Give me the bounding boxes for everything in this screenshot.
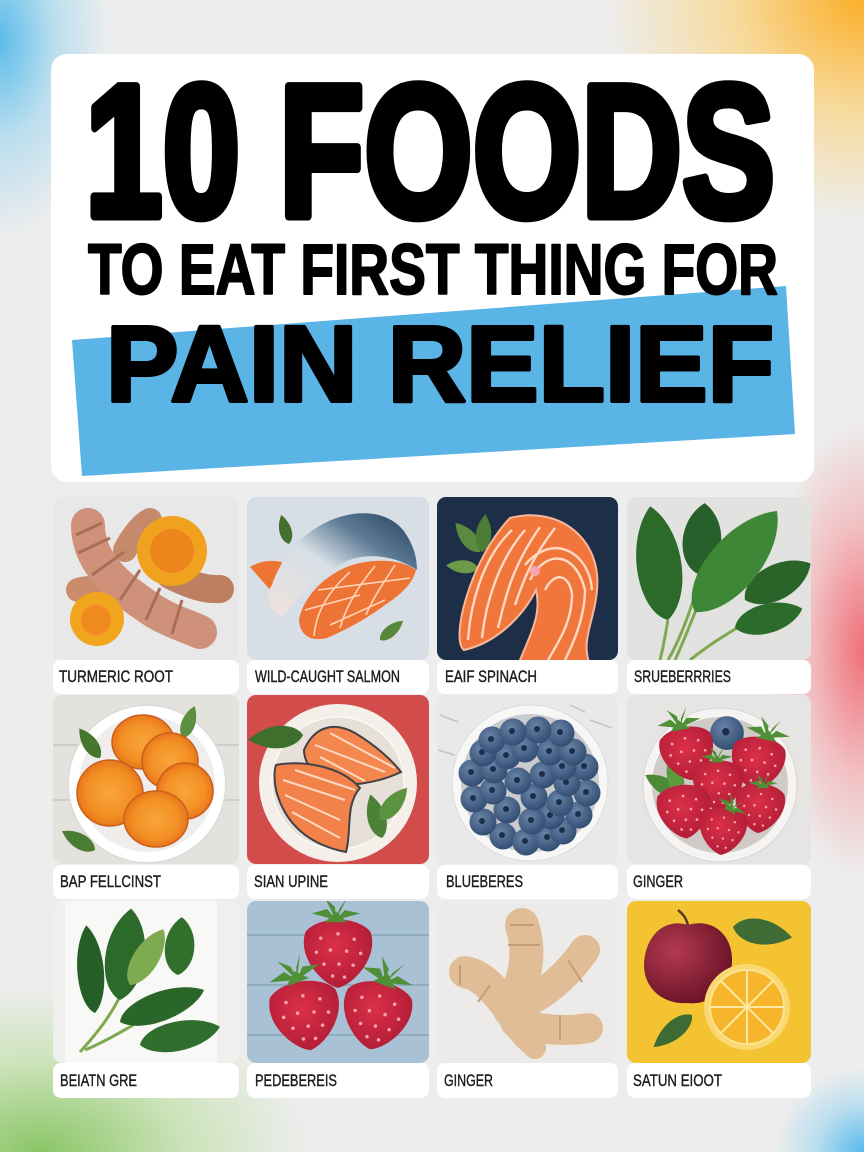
card: strawberries on wood: PEDEBEREIS <box>255 1072 337 1090</box>
card: salmon plate <box>247 695 429 899</box>
label <box>247 660 429 694</box>
label <box>437 1063 618 1098</box>
card: ginger: GINGER <box>444 1072 493 1090</box>
label <box>627 865 811 899</box>
card: wild-caught salmon: WILD-CAUGHT SALMON <box>255 668 400 686</box>
card: strawberries bowl: GINGER <box>633 873 683 891</box>
card: salmon plate: SIAN UPINE <box>254 873 328 891</box>
card: spinach leaves <box>627 495 819 694</box>
label <box>437 865 618 899</box>
card: apple and lemon <box>627 901 811 1098</box>
card: leaf spinach (salmon steak): EAIF SPINACH <box>445 668 537 686</box>
card: orange slices plate <box>53 695 239 899</box>
card: turmeric root: TURMERIC ROOT <box>59 668 173 686</box>
title: PAIN RELIEF: PAIN RELIEF <box>106 303 774 424</box>
card: leaf spinach (salmon steak) <box>437 497 618 694</box>
card: strawberries bowl <box>627 695 811 899</box>
label <box>437 660 618 694</box>
card: orange slices plate: BAP FELLCINST <box>60 873 161 891</box>
label <box>53 1063 239 1098</box>
card: spinach on white board: BEIATN GRE <box>60 1072 137 1090</box>
card: wild-caught salmon <box>247 497 429 694</box>
title panel <box>51 46 814 482</box>
card: spinach on white board <box>53 901 239 1098</box>
label <box>53 865 239 899</box>
card: apple and lemon: SATUN EIOOT <box>633 1072 722 1090</box>
card: strawberries on wood <box>247 898 429 1098</box>
label <box>627 660 811 694</box>
highlight band <box>72 286 795 476</box>
label <box>247 1063 429 1098</box>
label <box>53 660 239 694</box>
card: blueberries bowl: BLUEBERES <box>446 873 523 891</box>
card: ginger <box>437 901 618 1098</box>
label <box>627 1063 811 1098</box>
card: blueberries bowl <box>437 695 618 899</box>
card: turmeric root <box>53 497 239 694</box>
label <box>247 865 429 899</box>
card: spinach leaves: SRUEBERRRIES <box>634 668 731 686</box>
